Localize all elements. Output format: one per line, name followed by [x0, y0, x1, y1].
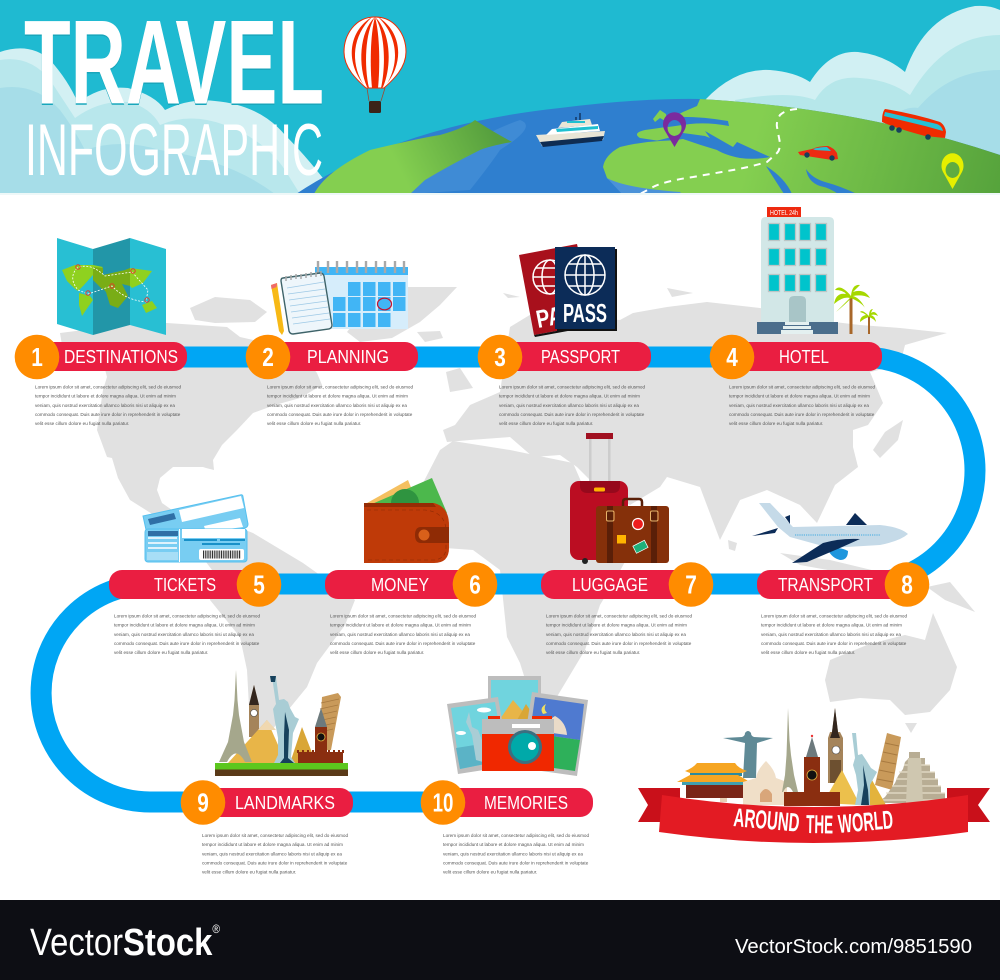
around the world emblem	[638, 708, 990, 843]
text block 8: tempor incididunt ut labore et dolore magna aliqua. Ut enim ad minim	[761, 623, 902, 628]
icon: tickets	[143, 495, 248, 562]
text block 10: commodo consequat. Duis aute irure dolor in reprehenderit in voluptate	[443, 860, 589, 866]
pill: planning: PLANNING	[307, 347, 389, 367]
text block 4: tempor incididunt ut labore et dolore magna aliqua. Ut enim ad minim	[729, 394, 870, 399]
text block 6: tempor incididunt ut labore et dolore magna aliqua. Ut enim ad minim	[330, 623, 471, 628]
pill: hotel	[732, 342, 882, 371]
pill: tickets: TICKETS	[154, 575, 216, 595]
text block 9: velit esse cillum dolore eu fugiat nulla pariatur.	[202, 870, 296, 875]
text block 6: commodo consequat. Duis aute irure dolor in reprehenderit in voluptate	[330, 641, 476, 646]
badge 10: 10	[433, 787, 453, 817]
text block 7: commodo consequat. Duis aute irure dolor in reprehenderit in voluptate	[546, 641, 692, 646]
badge 6	[453, 562, 497, 607]
icon: airplane	[752, 503, 908, 563]
text block 10: Lorem ipsum dolor sit amet, consectetur adipiscing elit, sed do eiusmod	[443, 833, 589, 838]
vectorstock logo: ®	[212, 922, 220, 936]
text block 6: Lorem ipsum dolor sit amet, consectetur adipiscing elit, sed do eiusmod	[330, 614, 476, 618]
pill: luggage	[541, 570, 691, 599]
badge 5: 5	[253, 570, 265, 599]
pill: memories: MEMORIES	[484, 793, 568, 813]
text block 10: velit esse cillum dolore eu fugiat nulla pariatur.	[443, 870, 537, 875]
text block 1: tempor incididunt ut labore et dolore magna aliqua. Ut enim ad minim	[35, 394, 176, 399]
text block 4: commodo consequat. Duis aute irure dolor in reprehenderit in voluptate	[729, 412, 875, 417]
image url: VectorStock.com/9851590	[735, 936, 972, 958]
icon: passports: PA	[534, 301, 565, 333]
text block 1: velit esse cillum dolore eu fugiat nulla pariatur.	[35, 421, 129, 426]
pill: memories	[443, 788, 593, 817]
pill: transport: TRANSPORT	[778, 575, 873, 595]
pill: hotel: HOTEL	[779, 347, 829, 367]
icon: passports: PASS	[563, 298, 607, 328]
text block 8: commodo consequat. Duis aute irure dolor in reprehenderit in voluptate	[761, 641, 907, 646]
text block 5: velit esse cillum dolore eu fugiat nulla pariatur.	[114, 650, 208, 655]
text block 4: veniam, quis nostrud exercitation ullamco laboris nisi ut aliquip ex ea	[729, 403, 869, 408]
route dashes	[640, 109, 797, 194]
text block 5: commodo consequat. Duis aute irure dolor in reprehenderit in voluptate	[114, 641, 260, 646]
icon: hotel: HOTEL 24h	[770, 208, 798, 217]
ribbon title: AROUND	[732, 802, 801, 838]
text block 1: veniam, quis nostrud exercitation ullamco laboris nisi ut aliquip ex ea	[35, 403, 175, 408]
text block 9: Lorem ipsum dolor sit amet, consectetur adipiscing elit, sed do eiusmod	[202, 833, 348, 838]
badge 1: 1	[31, 343, 43, 372]
badge 9: 9	[197, 788, 209, 817]
text block 9: commodo consequat. Duis aute irure dolor in reprehenderit in voluptate	[202, 860, 348, 866]
step 4 hotel	[710, 207, 882, 426]
ship	[536, 113, 605, 147]
text block 2: tempor incididunt ut labore et dolore magna aliqua. Ut enim ad minim	[267, 394, 408, 399]
text block 4: Lorem ipsum dolor sit amet, consectetur adipiscing elit, sed do eiusmod	[729, 384, 875, 390]
badge 2: 2	[262, 343, 274, 372]
pill: destinations	[37, 342, 187, 371]
pill: destinations: DESTINATIONS	[64, 347, 178, 367]
text block 7: Lorem ipsum dolor sit amet, consectetur adipiscing elit, sed do eiusmod	[546, 614, 692, 618]
text block 7: tempor incididunt ut labore et dolore magna aliqua. Ut enim ad minim	[546, 623, 687, 628]
text block 7: velit esse cillum dolore eu fugiat nulla pariatur.	[546, 650, 640, 655]
bus	[882, 109, 946, 140]
text block 1: commodo consequat. Duis aute irure dolor in reprehenderit in voluptate	[35, 412, 181, 417]
step 10 memories	[421, 676, 593, 875]
text block 7: veniam, quis nostrud exercitation ullamco laboris nisi ut aliquip ex ea	[546, 632, 686, 637]
text block 10: veniam, quis nostrud exercitation ullamco laboris nisi ut aliquip ex ea	[443, 851, 583, 856]
text block 3: veniam, quis nostrud exercitation ullamco laboris nisi ut aliquip ex ea	[499, 403, 639, 408]
text block 2: commodo consequat. Duis aute irure dolor in reprehenderit in voluptate	[267, 412, 413, 417]
text block 5: tempor incididunt ut labore et dolore magna aliqua. Ut enim ad minim	[114, 623, 255, 628]
text block 5: veniam, quis nostrud exercitation ullamco laboris nisi ut aliquip ex ea	[114, 632, 254, 637]
globe land right	[603, 99, 1000, 194]
text block 3: velit esse cillum dolore eu fugiat nulla pariatur.	[499, 421, 593, 426]
pill: luggage: LUGGAGE	[572, 575, 648, 595]
badge 8: 8	[901, 570, 913, 599]
hot air balloon	[344, 17, 406, 113]
pill: transport	[757, 570, 907, 599]
globe ocean	[296, 99, 1000, 194]
icon: folded map	[57, 238, 166, 335]
icon: wallet	[364, 478, 449, 563]
icon: calendar and notepad	[271, 261, 408, 335]
vectorstock logo: VectorStock	[30, 922, 227, 964]
step 7 luggage	[541, 433, 713, 655]
badge 6: 6	[469, 570, 481, 599]
step 3 passport	[478, 244, 651, 426]
header banner	[0, 0, 1000, 195]
pill: money	[325, 570, 475, 599]
badge 3: 3	[494, 343, 506, 372]
title: TRAVEL	[24, 0, 324, 131]
text block 8: Lorem ipsum dolor sit amet, consectetur adipiscing elit, sed do eiusmod	[761, 614, 907, 618]
text block 6: velit esse cillum dolore eu fugiat nulla pariatur.	[330, 650, 424, 655]
ribbon title: THE	[806, 809, 833, 839]
purple pin	[663, 112, 686, 147]
icon: passports	[519, 244, 617, 337]
text block 2: veniam, quis nostrud exercitation ullamco laboris nisi ut aliquip ex ea	[267, 403, 407, 408]
title	[24, 0, 324, 191]
badge 7	[669, 562, 713, 607]
text block 4: velit esse cillum dolore eu fugiat nulla pariatur.	[729, 421, 823, 426]
text block 6: veniam, quis nostrud exercitation ullamco laboris nisi ut aliquip ex ea	[330, 632, 470, 637]
text block 2: velit esse cillum dolore eu fugiat nulla pariatur.	[267, 421, 361, 426]
text block 3: tempor incididunt ut labore et dolore magna aliqua. Ut enim ad minim	[499, 394, 640, 399]
yellow pin	[942, 153, 963, 189]
route track	[40, 357, 975, 802]
badge 5	[237, 562, 281, 607]
pill: planning	[268, 342, 418, 371]
text block 9: veniam, quis nostrud exercitation ullamco laboris nisi ut aliquip ex ea	[202, 851, 342, 856]
skyline of landmarks	[677, 708, 945, 806]
step 2 planning	[246, 261, 418, 426]
world map background	[60, 287, 975, 750]
badge 2	[246, 335, 290, 379]
text block 1: Lorem ipsum dolor sit amet, consectetur adipiscing elit, sed do eiusmod	[35, 384, 181, 390]
step 1 destinations	[15, 238, 187, 426]
pill: passport	[500, 342, 651, 371]
pill: tickets	[109, 570, 259, 599]
title: INFOGRAPHIC	[25, 110, 323, 191]
badge 10	[421, 780, 465, 825]
icon: photos and camera	[447, 676, 588, 776]
globe land left	[314, 120, 512, 194]
text block 3: Lorem ipsum dolor sit amet, consectetur adipiscing elit, sed do eiusmod	[499, 384, 645, 390]
icon: hotel	[757, 207, 878, 334]
badge 8	[885, 562, 929, 607]
step 6 money	[325, 478, 497, 655]
text block 2: Lorem ipsum dolor sit amet, consectetur adipiscing elit, sed do eiusmod	[267, 384, 413, 390]
pill: landmarks: LANDMARKS	[235, 793, 335, 813]
text block 5: Lorem ipsum dolor sit amet, consectetur adipiscing elit, sed do eiusmod	[114, 614, 260, 618]
car	[798, 146, 838, 161]
footer bar	[0, 900, 1000, 980]
pill: landmarks	[203, 788, 353, 817]
icon: landmarks	[215, 670, 348, 776]
text block 3: commodo consequat. Duis aute irure dolor in reprehenderit in voluptate	[499, 412, 645, 417]
icon: luggage	[570, 433, 669, 564]
text block 8: veniam, quis nostrud exercitation ullamco laboris nisi ut aliquip ex ea	[761, 632, 901, 637]
right clouds	[705, 6, 1000, 194]
pill: money: MONEY	[371, 575, 429, 595]
badge 3	[478, 335, 522, 379]
badge 4	[710, 335, 754, 379]
badge 7: 7	[685, 570, 697, 599]
text block 9: tempor incididunt ut labore et dolore magna aliqua. Ut enim ad minim	[202, 842, 343, 847]
text block 10: tempor incididunt ut labore et dolore magna aliqua. Ut enim ad minim	[443, 842, 584, 847]
ribbon title: WORLD	[837, 804, 894, 839]
badge 1	[15, 335, 59, 379]
pill: passport: PASSPORT	[541, 347, 620, 367]
step 9 landmarks	[181, 670, 353, 875]
badge 4: 4	[726, 343, 738, 372]
ribbon title	[732, 802, 894, 839]
text block 8: velit esse cillum dolore eu fugiat nulla pariatur.	[761, 650, 855, 655]
left clouds	[0, 48, 335, 194]
step 5 tickets	[109, 495, 281, 655]
ribbon	[638, 788, 990, 843]
step 8 transport	[752, 503, 929, 655]
badge 9	[181, 780, 225, 825]
